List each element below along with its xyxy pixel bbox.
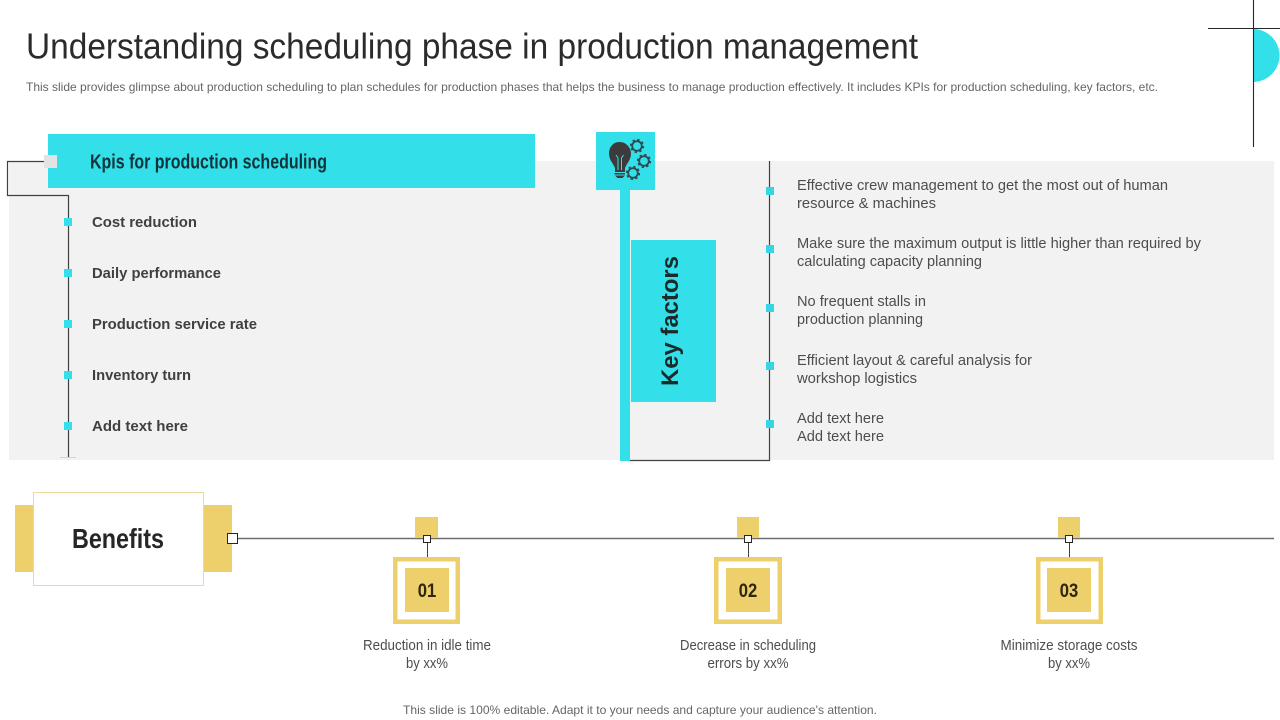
- benefit 3: 03: [1060, 580, 1078, 602]
- benefit 1: Reduction in idle time: [363, 637, 491, 654]
- benefit 1: [363, 517, 491, 672]
- factor: no frequent stalls: [766, 293, 926, 328]
- benefit 1: 01: [418, 580, 436, 602]
- factor: maximum output: calculating capacity planning: [797, 253, 982, 270]
- kpi: daily performance: Daily performance: [92, 265, 221, 282]
- vertical cyan bar: [620, 190, 630, 461]
- benefit 2: [680, 517, 816, 672]
- factor: add text: [766, 410, 884, 445]
- kpi: cost reduction: Cost reduction: [92, 214, 197, 231]
- benefit 2: errors by xx%: [708, 655, 788, 672]
- factor: crew management: Effective crew management to get the most out of human: [797, 177, 1168, 194]
- panel: benefits: [15, 492, 1274, 672]
- factor: no frequent stalls: production planning: [797, 311, 923, 328]
- subtitle text: This slide provides glimpse about production scheduling to plan schedules for production phases that helps the business to manage production effectively. It includes KPIs for production scheduling, key factors, etc.: [26, 80, 1158, 94]
- title: Understanding scheduling phase in production management: [26, 26, 918, 66]
- factor: crew management: [766, 177, 1168, 212]
- icon: light bulb with gears: [596, 132, 655, 190]
- kpi heading: Kpis for production scheduling: [90, 150, 327, 174]
- benefit 2: Decrease in scheduling: [680, 637, 816, 654]
- factor: efficient layout: workshop logistics: [796, 370, 917, 387]
- panel: key factors: [596, 132, 1201, 461]
- kpi heading bar: [48, 134, 535, 188]
- panel: KPIs for production scheduling: [8, 134, 535, 458]
- panel: background band: [9, 161, 1274, 460]
- timeline start node: [228, 534, 238, 544]
- key factors box: [631, 240, 716, 402]
- benefit 3: by xx%: [1048, 655, 1090, 672]
- key factors list: [766, 177, 1201, 445]
- benefit 3: [1000, 517, 1138, 672]
- timeline line: [232, 538, 1274, 540]
- benefits side tabs: [15, 505, 232, 572]
- kpi list: [64, 214, 257, 435]
- kpi: inventory turn: Inventory turn: [92, 367, 191, 384]
- factor: maximum output: Make sure the maximum output is little higher than required by: [797, 235, 1201, 252]
- kpi: production service rate: Production service rate: [92, 316, 257, 333]
- factor: add text: Add text here: [797, 410, 884, 427]
- benefit 2: 02: [739, 580, 757, 602]
- footer note: This slide is 100% editable. Adapt it to your needs and capture your audience's attention.: [403, 703, 877, 717]
- kpi line end tick: [60, 456, 76, 458]
- factor: maximum output: [766, 235, 1201, 270]
- factor: efficient layout: [766, 352, 1032, 387]
- factor: crew management: resource & machines: [797, 195, 936, 212]
- factor: efficient layout: Efficient layout & careful analysis for: [797, 352, 1032, 369]
- kpi connector line: [8, 162, 68, 458]
- benefit 1: by xx%: [406, 655, 448, 672]
- kpi connector node: [44, 155, 57, 168]
- benefits heading: Benefits: [72, 523, 164, 554]
- factor: no frequent stalls: No frequent stalls in: [797, 293, 926, 310]
- benefit 3: Minimize storage costs: [1000, 637, 1138, 654]
- key factors label: Key factors: [657, 256, 684, 386]
- factor: add text: Add text here: [797, 428, 884, 445]
- benefits heading box: [34, 492, 204, 586]
- corner decoration: [1208, 0, 1280, 147]
- kpi: add text: Add text here: [92, 418, 188, 435]
- key factors connector line: [630, 161, 770, 460]
